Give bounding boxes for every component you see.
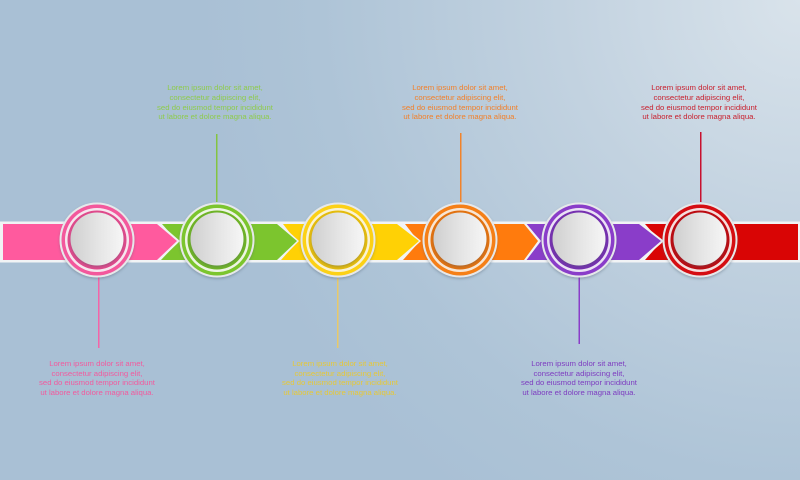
node: purple (542, 202, 616, 278)
text block: yellow: ut labore et dolore magna aliqua. (283, 388, 397, 397)
text block: green: Lorem ipsum dolor sit amet, (167, 83, 263, 92)
connector: purple (578, 276, 580, 344)
segment: yellow (278, 222, 421, 262)
text block: pink: sed do eiusmod tempor incididunt (39, 378, 156, 387)
text block: pink: ut labore et dolore magna aliqua. (40, 388, 154, 397)
text block: yellow: sed do eiusmod tempor incididunt (282, 378, 399, 387)
text block: green (157, 83, 274, 121)
connector: red (700, 132, 702, 202)
segment: orange (400, 222, 541, 262)
node: pink (60, 202, 134, 278)
text block: red: consectetur adipiscing elit, (654, 93, 744, 102)
connector: pink (98, 276, 100, 348)
connector: orange (460, 133, 462, 202)
text block: green: consectetur adipiscing elit, (170, 93, 260, 102)
text block: orange (402, 83, 519, 121)
segment: green (158, 222, 299, 262)
text block: pink: Lorem ipsum dolor sit amet, (49, 359, 145, 368)
text block: purple: sed do eiusmod tempor incididunt (521, 378, 638, 387)
timeline band (0, 222, 800, 262)
text block: purple: consectetur adipiscing elit, (534, 369, 624, 378)
text block: orange: sed do eiusmod tempor incididunt (402, 103, 519, 112)
text block: red: Lorem ipsum dolor sit amet, (651, 83, 747, 92)
text block: yellow: consectetur adipiscing elit, (295, 369, 385, 378)
text block: green: ut labore et dolore magna aliqua. (158, 112, 272, 121)
text block: red: sed do eiusmod tempor incididunt (641, 103, 758, 112)
node: red (662, 202, 738, 278)
text block: red (641, 83, 758, 121)
segment: red (645, 224, 798, 260)
text block: yellow: Lorem ipsum dolor sit amet, (292, 359, 388, 368)
node: green (180, 202, 254, 278)
band white outline (0, 222, 800, 262)
text block: orange: ut labore et dolore magna aliqua. (403, 112, 517, 121)
connector: yellow (337, 278, 338, 348)
text block: green: sed do eiusmod tempor incididunt (157, 103, 274, 112)
segment: pink (0, 222, 180, 262)
segment: purple (521, 222, 664, 262)
text block: orange: consectetur adipiscing elit, (415, 93, 505, 102)
text block: red: ut labore et dolore magna aliqua. (642, 112, 756, 121)
node: orange (422, 202, 498, 278)
connector: green (216, 134, 218, 202)
text block: pink (39, 359, 156, 397)
text block: yellow (282, 359, 399, 397)
text block: purple: ut labore et dolore magna aliqua. (522, 388, 636, 397)
text block: purple: Lorem ipsum dolor sit amet, (531, 359, 627, 368)
text block: purple (521, 359, 638, 397)
node: yellow (300, 202, 376, 278)
text block: pink: consectetur adipiscing elit, (52, 369, 142, 378)
text block: orange: Lorem ipsum dolor sit amet, (412, 83, 508, 92)
